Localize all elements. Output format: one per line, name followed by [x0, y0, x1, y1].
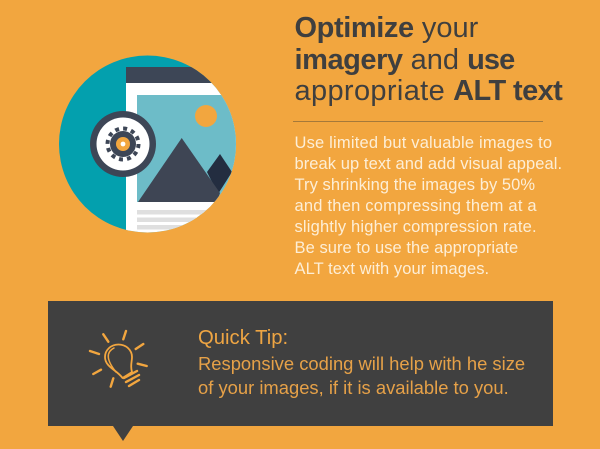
body text: slightly higher compression rate. — [294, 218, 537, 236]
heading: imagery and use — [294, 44, 514, 76]
icon: light bulb — [90, 331, 147, 387]
body text: Use limited but valuable images to — [294, 134, 552, 152]
quick tip text — [198, 353, 525, 398]
body text — [294, 134, 562, 278]
illustration: image and gear in teal circle — [59, 56, 236, 232]
body text: and then compressing them at a — [294, 197, 537, 215]
body text: Be sure to use the appropriate — [294, 239, 518, 257]
quick tip callout box — [48, 301, 553, 441]
heading: Optimize your — [294, 12, 478, 44]
quick tip heading: Quick Tip: — [198, 326, 288, 348]
gear badge — [90, 111, 156, 177]
body text: break up text and add visual appeal. — [294, 155, 562, 173]
body text: Try shrinking the images by 50% — [294, 176, 535, 194]
body text: ALT text with your images. — [294, 260, 489, 278]
teal circle — [59, 56, 236, 232]
quick tip text: of your images, if it is available to you. — [198, 377, 509, 398]
heading: appropriate ALT text — [294, 75, 562, 107]
webpage illustration — [126, 67, 236, 232]
quick tip text: Responsive coding will help with he size — [198, 353, 525, 374]
divider — [293, 121, 543, 122]
heading — [294, 12, 562, 107]
